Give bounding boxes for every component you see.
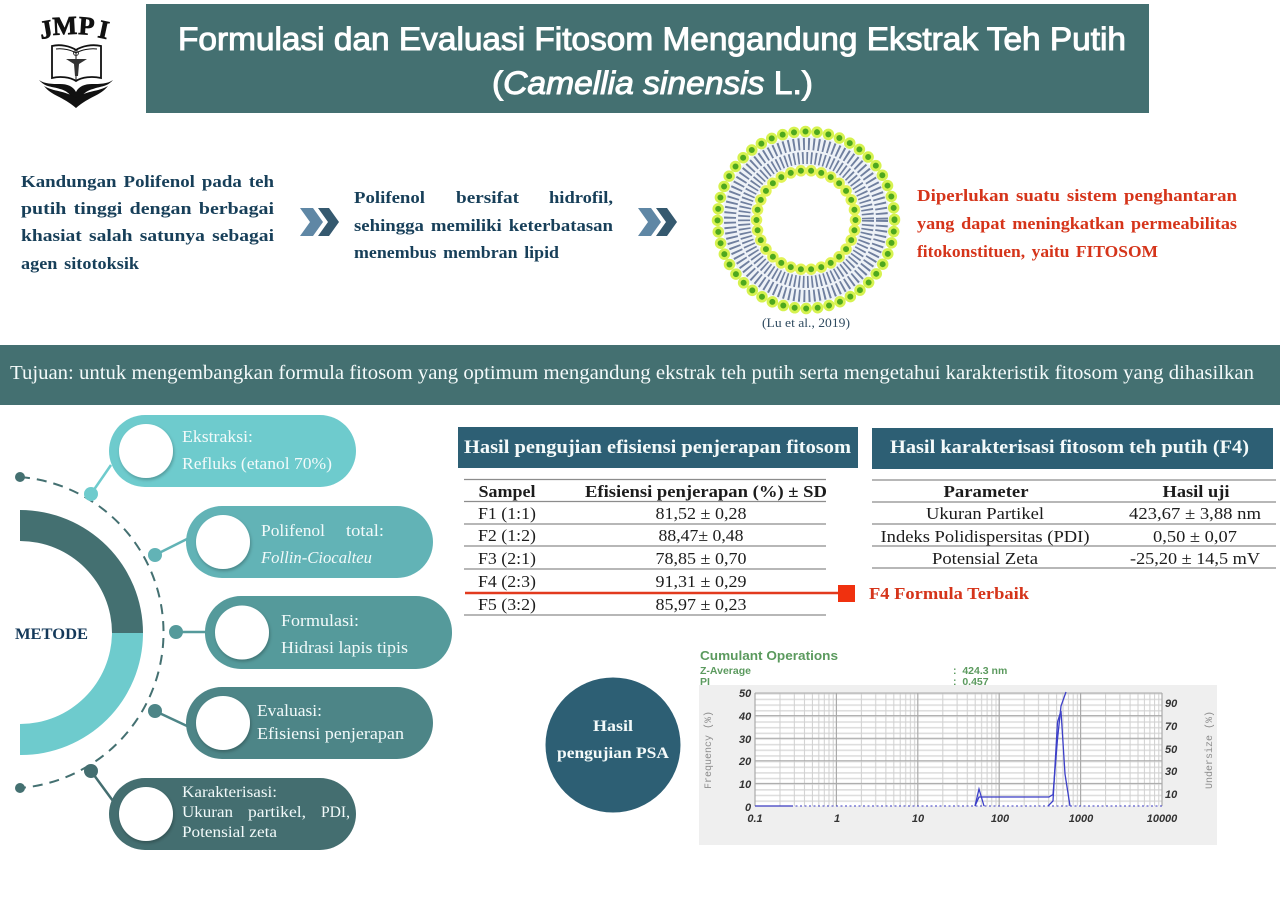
table: characterization: Hasil uji — [1162, 482, 1230, 501]
y axis right labels — [1165, 698, 1178, 801]
table: efficiency: 78,85 ± 0,70 — [656, 549, 746, 568]
table: characterization: Indeks Polidispersitas (PDI) — [880, 527, 1090, 546]
title banner — [146, 4, 1149, 113]
chart: PSA: Undersize (%) — [1204, 711, 1216, 789]
step: polifenol total: Follin-Ciocalteu — [260, 548, 372, 567]
heading: efficiency — [458, 427, 858, 468]
step: ekstraksi: Ekstraksi: — [182, 427, 253, 446]
step: karakterisasi: PDI, — [321, 804, 350, 821]
chart header: : 0.457 — [953, 676, 989, 688]
text block: polifenol content: agen sitotoksik — [21, 254, 140, 273]
x axis labels: 0.1 — [747, 813, 763, 825]
table: efficiency: 88,47± 0,48 — [658, 526, 744, 545]
table: efficiency: 91,31 ± 0,29 — [656, 572, 746, 591]
table: characterization: Potensial Zeta — [932, 549, 1038, 568]
logo: JMPI: JMPI — [37, 11, 112, 45]
y axis left labels: 40 — [738, 711, 752, 723]
text block: polifenol content: Kandungan Polifenol pada teh — [21, 172, 274, 191]
x axis labels — [747, 813, 1178, 825]
chart: PSA — [699, 648, 1217, 845]
table: characterization: Ukuran Partikel — [926, 504, 1044, 523]
text block: phytosome need — [917, 186, 1238, 261]
text block: polifenol content: putih tinggi dengan berbagai — [21, 199, 274, 218]
table: efficiency: F1 (1:1) — [478, 504, 536, 523]
data lines — [975, 692, 1070, 806]
step: karakterisasi: Karakterisasi: — [182, 784, 277, 801]
y axis right labels: 30 — [1165, 766, 1178, 778]
y axis right labels: 90 — [1165, 698, 1178, 710]
chart header: Z-Average — [700, 665, 751, 677]
text block: phytosome need: Diperlukan suatu sistem penghantaran — [917, 186, 1237, 205]
table: efficiency: Sampel — [478, 482, 536, 501]
table: efficiency: 85,97 ± 0,23 — [656, 595, 746, 614]
table: characterization: 423,67 ± 3,88 nm — [1129, 504, 1261, 523]
axis titles: Frequency (%) — [703, 711, 715, 789]
heading: characterization: Hasil karakterisasi fitosom teh putih (F4) — [890, 437, 1249, 458]
x axis labels: 10000 — [1147, 813, 1178, 825]
badge: PSA: pengujian PSA — [557, 745, 669, 762]
table: characterization: -25,20 ± 14,5 mV — [1130, 549, 1261, 568]
table: efficiency: F2 (1:2) — [478, 526, 536, 545]
diagram: phytosome bilayer — [718, 132, 894, 308]
objective band: Tujuan: untuk mengembangkan formula fitosom yang optimum mengandung ekstrak teh putih serta mengetahui karakteristik fitosom yang dihasilkan — [10, 362, 1254, 384]
step: polifenol total: total: — [346, 521, 384, 540]
y axis right labels: 70 — [1165, 721, 1178, 733]
y axis left labels — [738, 688, 752, 814]
table: characterization: Parameter — [944, 482, 1029, 501]
y axis right labels: 50 — [1165, 744, 1178, 756]
chart header: : 424.3 nm — [953, 665, 1007, 677]
chart header: PI — [700, 676, 710, 688]
text block: hydrophilic limitation: sehingga memiliki keterbatasan — [354, 216, 613, 235]
table: characterization: 0,50 ± 0,07 — [1153, 527, 1238, 546]
central half ring: upper — [20, 510, 143, 633]
step: evaluasi: Efisiensi penjerapan — [257, 724, 404, 743]
y axis left labels: 20 — [738, 756, 752, 768]
y axis left labels: 0 — [745, 802, 752, 814]
text block: polifenol content: khasiat salah satunya sebagai — [21, 226, 274, 245]
dashed arc — [20, 477, 164, 788]
text block: hydrophilic limitation: bersifat — [456, 188, 520, 207]
logo: JMPI — [37, 11, 113, 108]
y axis left labels: 10 — [739, 779, 752, 791]
table: efficiency: Efisiensi penjerapan (%) ± SD — [585, 482, 827, 501]
caption: citation: (Lu et al., 2019) — [762, 315, 850, 330]
y axis left labels: 50 — [739, 688, 752, 700]
table: efficiency: 81,52 ± 0,28 — [656, 504, 746, 523]
x axis labels: 1 — [834, 813, 840, 825]
callout: best formula: F4 Formula Terbaik — [869, 584, 1030, 603]
chart header — [700, 648, 1007, 688]
step: ekstraksi — [84, 415, 356, 501]
text block: phytosome need: fitokonstituen, yaitu FITOSOM — [917, 242, 1158, 261]
text block: phytosome need: yang dapat meningkatkan permeabilitas — [917, 214, 1238, 233]
text block: hydrophilic limitation: menembus membran lipid — [354, 243, 559, 262]
step: formulasi: Formulasi: — [281, 611, 359, 630]
text block: hydrophilic limitation — [354, 188, 613, 262]
step: evaluasi — [148, 687, 433, 759]
method label: METODE — [15, 626, 88, 643]
table: efficiency: F5 (3:2) — [478, 595, 536, 614]
x axis labels: 1000 — [1069, 813, 1094, 825]
title banner: Formulasi dan Evaluasi Fitosom Mengandung Ekstrak Teh Putih — [178, 21, 1126, 57]
chart header: Cumulant Operations — [700, 648, 838, 663]
text block: hydrophilic limitation: hidrofil, — [549, 188, 613, 207]
table: characterization — [872, 480, 1276, 568]
step: karakterisasi — [84, 764, 356, 850]
step: karakterisasi: Ukuran — [182, 804, 233, 821]
arrow: double chevron 2 — [638, 208, 677, 236]
step: formulasi — [169, 596, 452, 669]
central half ring: lower — [20, 633, 143, 755]
method diagram — [15, 415, 452, 850]
step: polifenol total: Polifenol — [261, 521, 325, 540]
y axis left labels: 30 — [739, 734, 752, 746]
step: karakterisasi: Potensial zeta — [182, 824, 277, 841]
badge: PSA — [546, 678, 680, 812]
step: ekstraksi: Refluks (etanol 70%) — [182, 454, 332, 473]
y axis right labels: 10 — [1165, 789, 1178, 801]
end points — [15, 472, 25, 793]
step: karakterisasi: partikel, — [248, 804, 306, 821]
badge: PSA: Hasil — [593, 718, 634, 735]
step: polifenol total — [148, 506, 433, 578]
step: formulasi: Hidrasi lapis tipis — [281, 638, 408, 657]
table: efficiency — [464, 480, 827, 615]
arrow: double chevron 1 — [300, 208, 339, 236]
heading: characterization — [872, 428, 1273, 469]
heading: efficiency: Hasil pengujian efisiensi penjerapan fitosom — [464, 437, 851, 458]
table: efficiency: F4 (2:3) — [478, 572, 536, 591]
x axis labels: 100 — [991, 813, 1010, 825]
text block: polifenol content — [21, 172, 274, 273]
title banner: (Camellia sinensis L.) — [492, 65, 813, 101]
step: evaluasi: Evaluasi: — [257, 701, 322, 720]
x axis labels: 10 — [912, 813, 925, 825]
text block: hydrophilic limitation: Polifenol — [354, 188, 425, 207]
table: efficiency: F3 (2:1) — [478, 549, 536, 568]
objective band — [0, 345, 1280, 405]
callout: best formula — [465, 584, 1030, 603]
